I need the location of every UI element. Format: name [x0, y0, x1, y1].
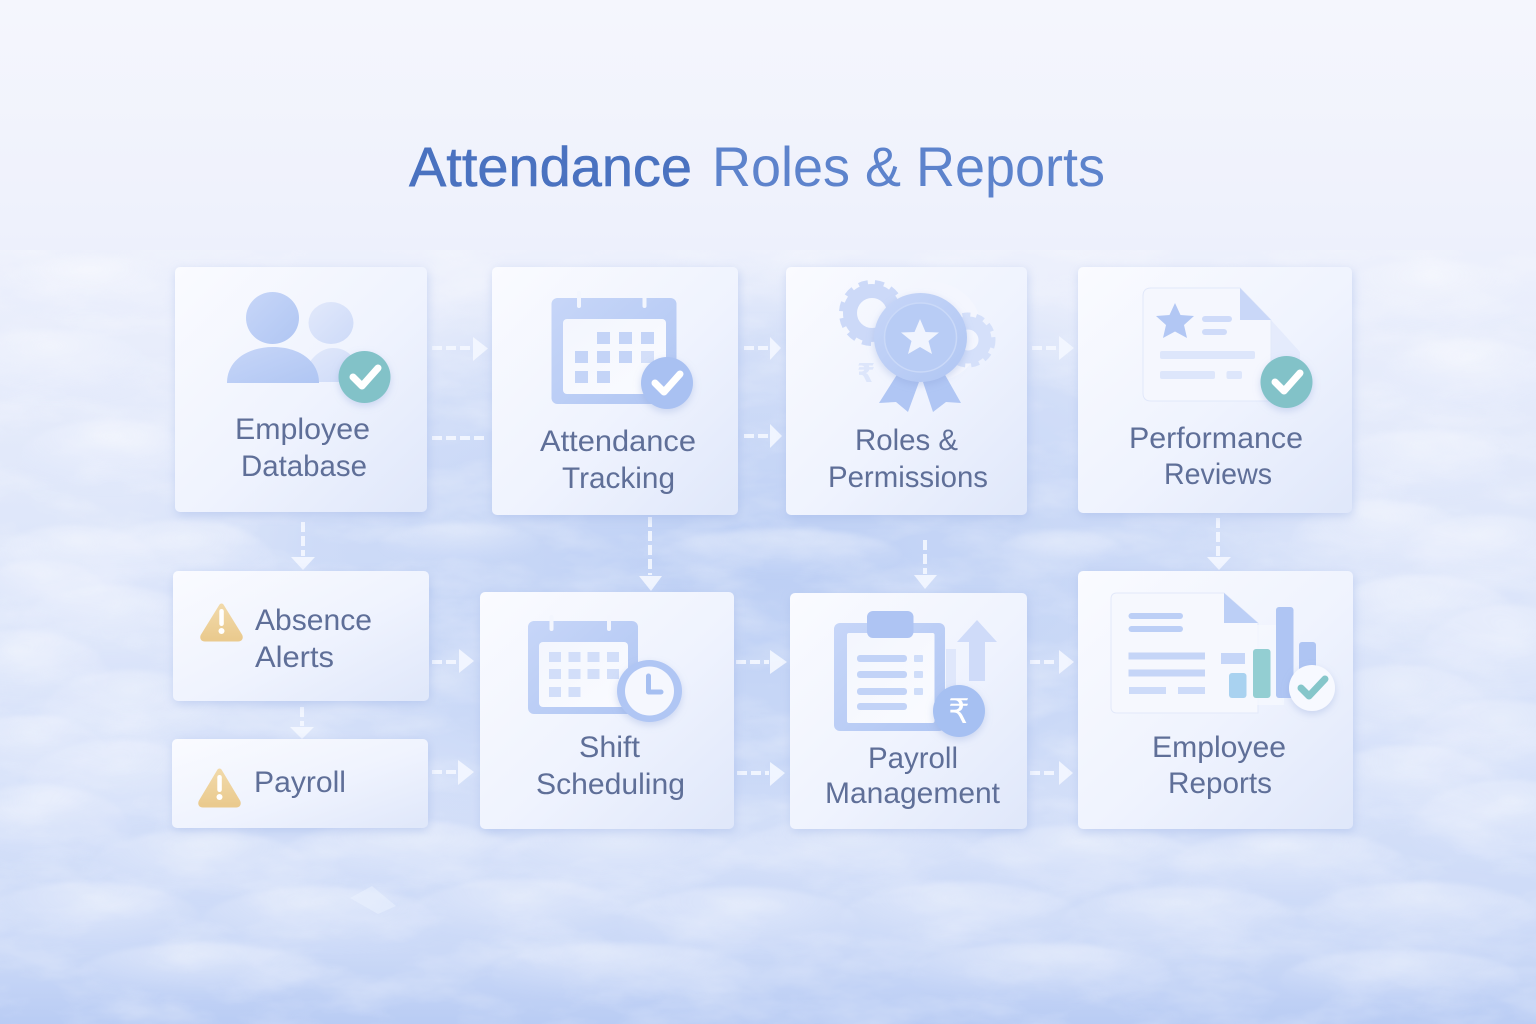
- panel: roles and permissions: [786, 267, 1027, 515]
- arrow: absence alerts to shift scheduling: [432, 649, 474, 673]
- arrow: shift scheduling to payroll management: [736, 650, 787, 674]
- arrow: payroll management to employee reports, lower: [1030, 761, 1073, 785]
- label: Payroll: [254, 766, 346, 799]
- arrow: performance reviews down to employee reports: [1207, 518, 1231, 570]
- label: Permissions: [828, 461, 988, 494]
- panel: employee reports: [1078, 571, 1353, 829]
- label: Tracking: [562, 462, 675, 495]
- icon: review document with check: [1143, 288, 1312, 408]
- arrow: attendance tracking to roles: [744, 337, 781, 360]
- label: Employee: [235, 413, 370, 446]
- label: [1152, 731, 1286, 800]
- arrow: employee database to attendance tracking: [432, 337, 488, 361]
- label: [540, 425, 696, 495]
- label: [828, 424, 988, 494]
- label: [235, 413, 370, 483]
- icon: people with check: [227, 292, 390, 403]
- label: Reviews: [1164, 458, 1272, 491]
- panel: payroll management: [790, 593, 1027, 829]
- title: [409, 135, 1105, 198]
- label: Management: [825, 777, 1001, 810]
- label: Employee: [1152, 731, 1286, 764]
- title: Roles & Reports: [712, 135, 1105, 198]
- label: [536, 731, 685, 801]
- label: Performance: [1129, 422, 1303, 455]
- arrow: attendance tracking to roles, lower: [744, 424, 782, 448]
- panel: performance reviews: [1078, 267, 1352, 513]
- label: Database: [241, 450, 367, 483]
- icon: warning triangle: [201, 771, 238, 805]
- arrow: payroll management to employee reports: [1030, 650, 1074, 674]
- label: Alerts: [255, 641, 334, 674]
- label: Shift: [579, 731, 641, 764]
- panel: payroll: [172, 739, 428, 828]
- label: Attendance: [540, 425, 696, 458]
- icon: calendar with clock: [528, 615, 682, 722]
- icon: medal with gears: [842, 282, 993, 412]
- arrow: employee database down to absence alerts: [291, 522, 315, 570]
- icon: warning triangle: [203, 606, 240, 639]
- icon: calendar with check: [552, 291, 693, 409]
- label: Reports: [1168, 767, 1272, 800]
- icon: clipboard with arrow and rupee: [834, 611, 997, 737]
- arrow: attendance tracking down to shift scheduling: [639, 517, 662, 591]
- label: Payroll: [868, 742, 958, 775]
- label: Absence: [255, 604, 372, 637]
- panel: absence alerts: [173, 571, 429, 701]
- title: Attendance: [409, 135, 692, 198]
- label: [255, 604, 372, 674]
- icon: clipboard with arrow and rupee: ₹: [948, 692, 970, 732]
- arrow: roles to performance reviews: [1032, 336, 1074, 360]
- panel: attendance tracking: [492, 267, 738, 515]
- panel: shift scheduling: [480, 592, 734, 829]
- label: [1129, 422, 1303, 491]
- panel: employee database: [175, 267, 427, 512]
- arrow: payroll to shift scheduling: [432, 760, 474, 785]
- arrow: roles down to payroll management: [914, 540, 937, 589]
- label: Roles &: [855, 424, 958, 457]
- label: Scheduling: [536, 768, 685, 801]
- label: [825, 742, 1001, 810]
- connector: employee database to attendance tracking, lower: [432, 436, 486, 440]
- icon: report with bar chart: [1111, 593, 1335, 713]
- arrow: shift scheduling to payroll management, lower: [737, 762, 785, 786]
- arrow: absence alerts down to payroll: [290, 707, 314, 739]
- icon: medal with gears: ₹: [857, 358, 875, 388]
